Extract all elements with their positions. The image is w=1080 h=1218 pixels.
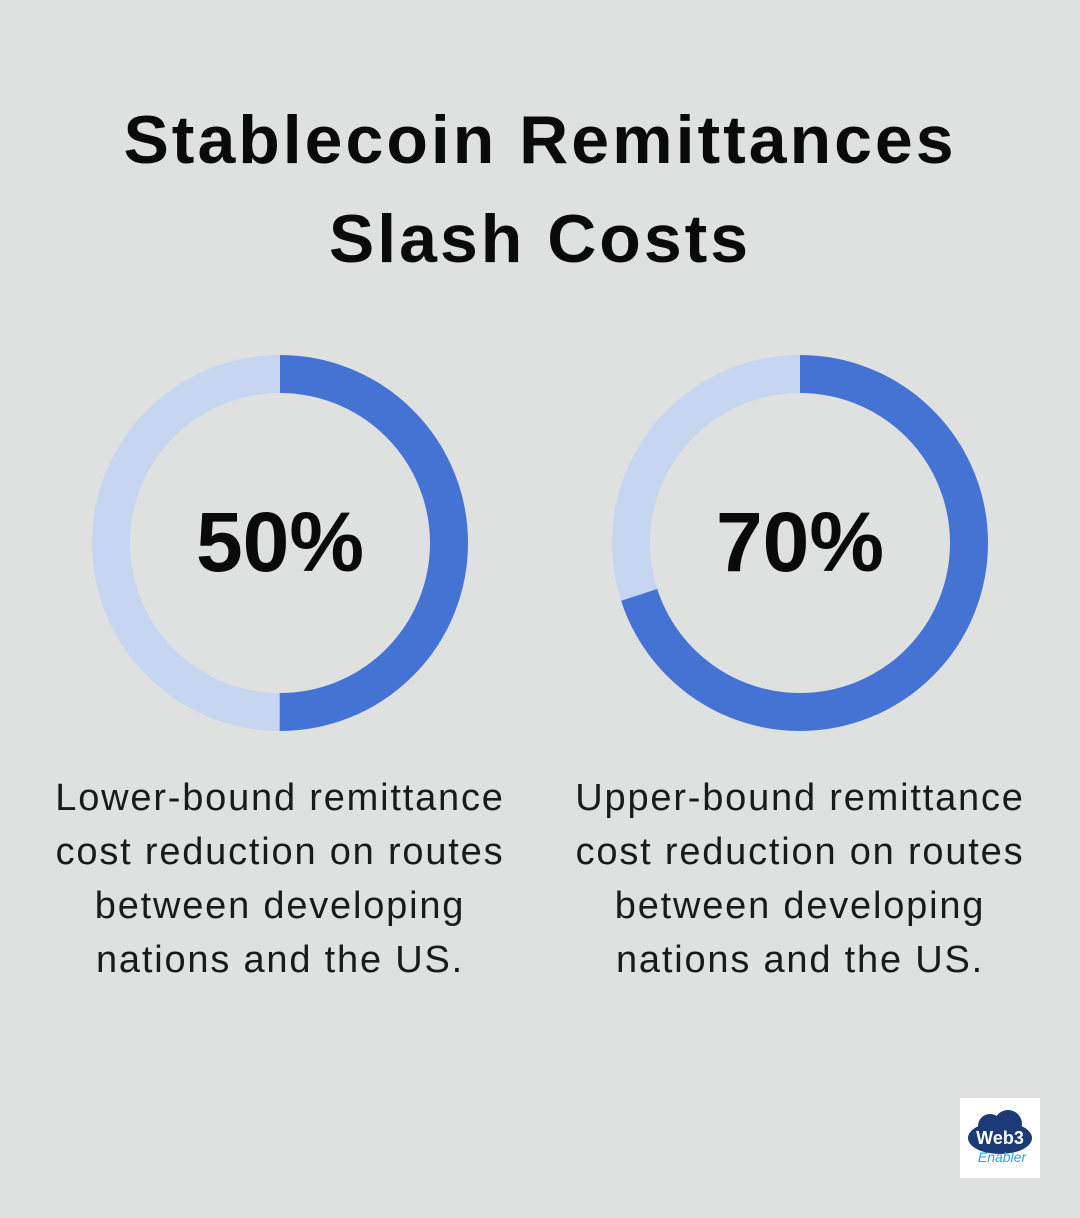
caption: lower-bound: nations and the US.: [96, 939, 464, 981]
caption: upper-bound: nations and the US.: [616, 939, 984, 981]
caption: lower-bound: Lower-bound remittance: [55, 777, 505, 819]
caption: upper-bound: between developing: [615, 885, 985, 927]
title: [123, 102, 957, 277]
caption: lower-bound: between developing: [95, 885, 465, 927]
donut chart: 70%: [612, 355, 988, 731]
donut chart: 50%: [92, 355, 468, 731]
caption: upper-bound: [575, 777, 1025, 981]
caption: upper-bound: Upper-bound remittance: [575, 777, 1025, 819]
donut chart: 70%: 70%: [716, 495, 884, 589]
logo: Web3: Enabler: [978, 1149, 1027, 1165]
title: Stablecoin Remittances: [123, 102, 957, 178]
caption: lower-bound: cost reduction on routes: [56, 831, 504, 873]
title: Slash Costs: [329, 201, 751, 277]
logo: Web3: [960, 1098, 1040, 1178]
caption: lower-bound: [55, 777, 505, 981]
donut chart: 50%: 50%: [196, 495, 364, 589]
logo: Web3: Web3: [976, 1128, 1024, 1148]
caption: upper-bound: cost reduction on routes: [576, 831, 1024, 873]
